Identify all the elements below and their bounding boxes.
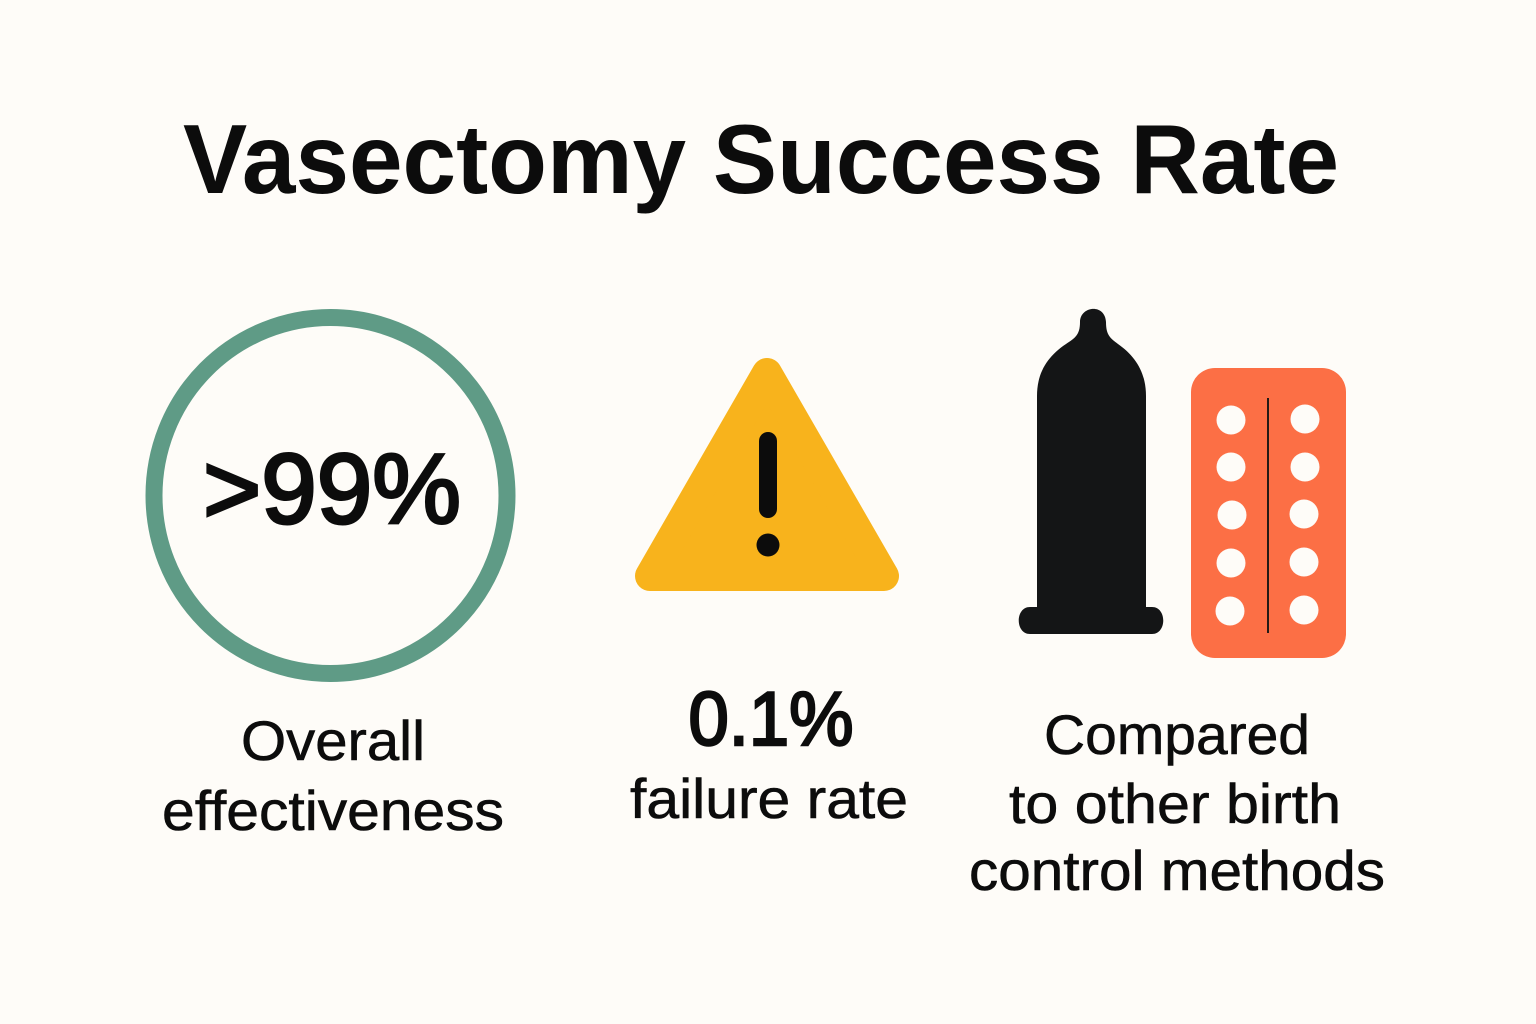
- label: overall effectiveness: effectiveness: [162, 779, 504, 842]
- panel: failure rate: [630, 373, 908, 830]
- panel: overall effectiveness: [154, 318, 507, 842]
- icon: condom: [1019, 309, 1163, 634]
- label: compared to other birth control methods: Compared: [1044, 703, 1310, 766]
- label: compared to other birth control methods: [969, 703, 1385, 902]
- panel: comparison to other methods: [969, 309, 1385, 902]
- icon: green ring: [154, 318, 507, 674]
- label: compared to other birth control methods: to other birth: [1009, 772, 1341, 835]
- stat: 0.1%: 0.1%: [688, 677, 854, 762]
- icon: warning triangle: [650, 373, 884, 576]
- stat: >99%: >99%: [203, 433, 461, 544]
- icon: pill blister pack: [1191, 368, 1346, 658]
- title: Vasectomy Success Rate: [183, 104, 1339, 214]
- label: overall effectiveness: Overall: [241, 709, 425, 772]
- label: compared to other birth control methods: control methods: [969, 839, 1385, 902]
- label: failure rate: failure rate: [630, 767, 908, 830]
- label: overall effectiveness: [162, 709, 504, 842]
